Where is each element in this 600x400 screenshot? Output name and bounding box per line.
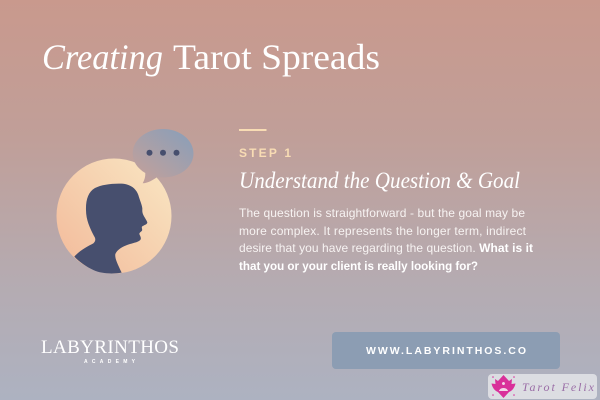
body text xyxy=(239,206,533,273)
badge text: Tarot Felix xyxy=(522,380,595,394)
step heading: Understand the Question & Goal xyxy=(239,168,520,193)
icon: bubble dots xyxy=(146,150,180,156)
title: Creating xyxy=(42,37,163,77)
body text: more complex. It represents the longer term, indirect xyxy=(239,224,527,238)
button: website: WWW.LABYRINTHOS.CO xyxy=(366,345,526,357)
accent line xyxy=(239,129,266,131)
icon: head silhouette xyxy=(74,184,147,273)
icon: peach circle xyxy=(56,158,172,274)
logo: Labyrinthos Academy: LABYRINTHOS xyxy=(41,337,179,358)
badge: Tarot Felix xyxy=(488,374,597,399)
icon: speech bubble xyxy=(133,129,194,183)
body text: that you or your client is really looking for? xyxy=(239,259,478,273)
body text: desire that you have regarding the question. What is it xyxy=(239,241,533,255)
logo: Labyrinthos Academy: ACADEMY xyxy=(84,359,136,365)
illustration: person with speech bubble xyxy=(56,129,194,274)
title xyxy=(42,37,380,77)
button: website xyxy=(332,332,560,369)
icon: pink lotus xyxy=(492,375,516,398)
body text: The question is straightforward - but the goal may be xyxy=(239,206,525,220)
title: Tarot Spreads xyxy=(173,37,380,77)
step label: STEP 1 xyxy=(239,146,291,160)
